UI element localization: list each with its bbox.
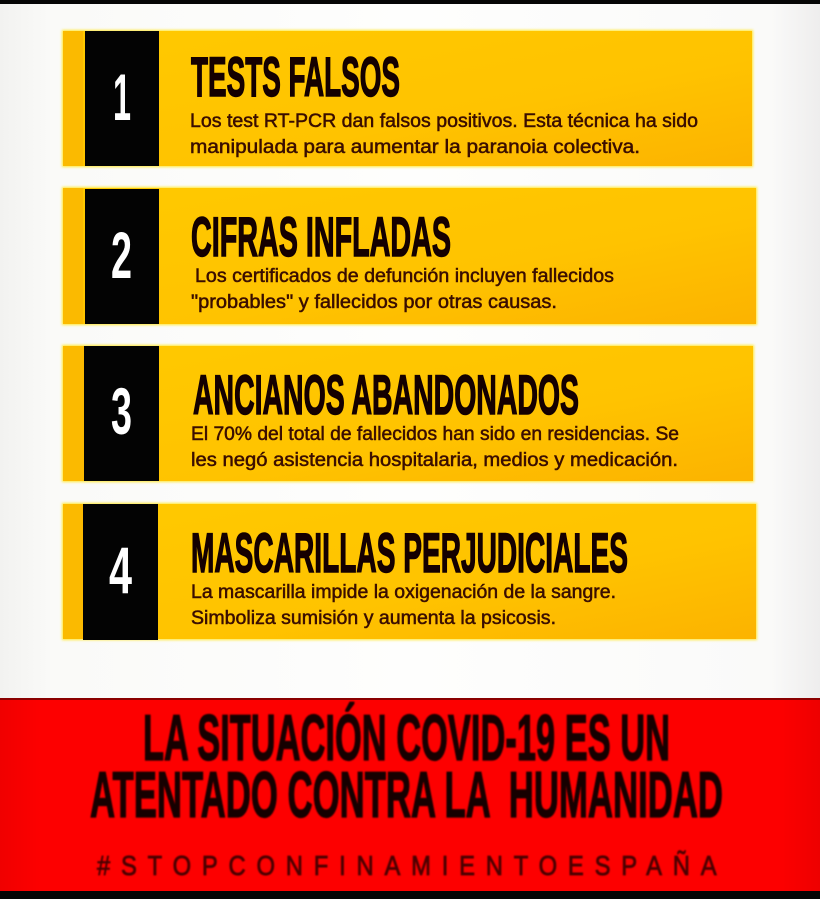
panel: 2 cifras infladas xyxy=(62,187,757,325)
number block 3: 3 xyxy=(111,374,132,448)
description 4: La mascarilla impide la oxigenación de la sangre. xyxy=(191,582,616,603)
description 3: El 70% del total de fallecidos han sido en residencias. Se xyxy=(191,424,679,445)
description 3 xyxy=(191,424,679,471)
panel: 1 tests falsos xyxy=(62,30,753,167)
description 1: manipulada para aumentar la paranoia colectiva. xyxy=(190,137,640,158)
number block 4: 4 xyxy=(109,533,132,607)
number block 1: 1 xyxy=(113,60,131,134)
panel: 3 ancianos abandonados xyxy=(62,345,754,482)
description 4: Simboliza sumisión y aumenta la psicosis. xyxy=(191,608,556,629)
number block 4 xyxy=(83,504,158,640)
description 4 xyxy=(191,582,616,629)
panel: 1 tests falsos: TESTS FALSOS xyxy=(191,45,400,108)
description 1 xyxy=(190,111,698,158)
number block 3 xyxy=(84,346,159,481)
banner headline xyxy=(90,701,723,831)
description 2 xyxy=(191,266,614,313)
top black edge xyxy=(0,0,820,4)
description 2: "probables" y fallecidos por otras causas. xyxy=(191,292,557,313)
description 3: les negó asistencia hospitalaria, medios y medicación. xyxy=(191,450,678,471)
hashtag: #STOPCONFINAMIENTOESPAÑA xyxy=(97,849,717,881)
panel: red banner xyxy=(0,698,820,892)
description 2: Los certificados de defunción incluyen fallecidos xyxy=(195,266,614,287)
panel: 4 mascarillas perjudiciales xyxy=(62,503,757,640)
number block 1 xyxy=(85,31,159,166)
description 1: Los test RT-PCR dan falsos positivos. Esta técnica ha sido xyxy=(190,111,698,132)
number block 2 xyxy=(85,189,159,324)
heading: cifras infladas: CIFRAS INFLADAS xyxy=(191,205,451,268)
bottom black edge xyxy=(0,891,820,899)
number block 2: 2 xyxy=(111,218,132,292)
